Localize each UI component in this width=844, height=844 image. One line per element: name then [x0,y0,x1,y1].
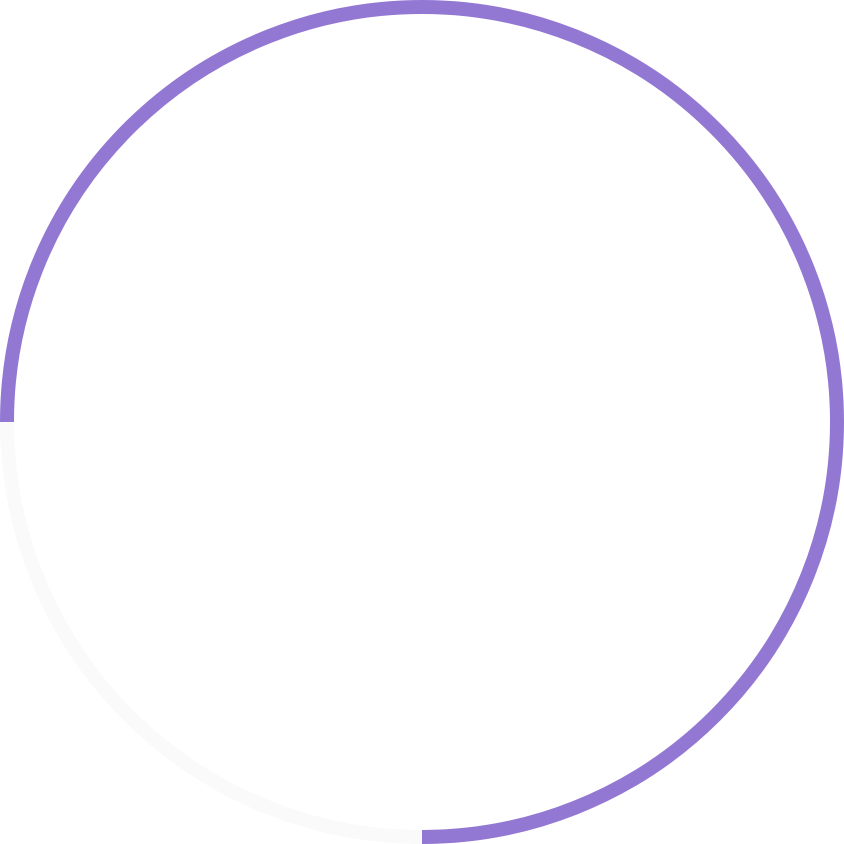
ring track: remaining quarter [7,422,422,837]
